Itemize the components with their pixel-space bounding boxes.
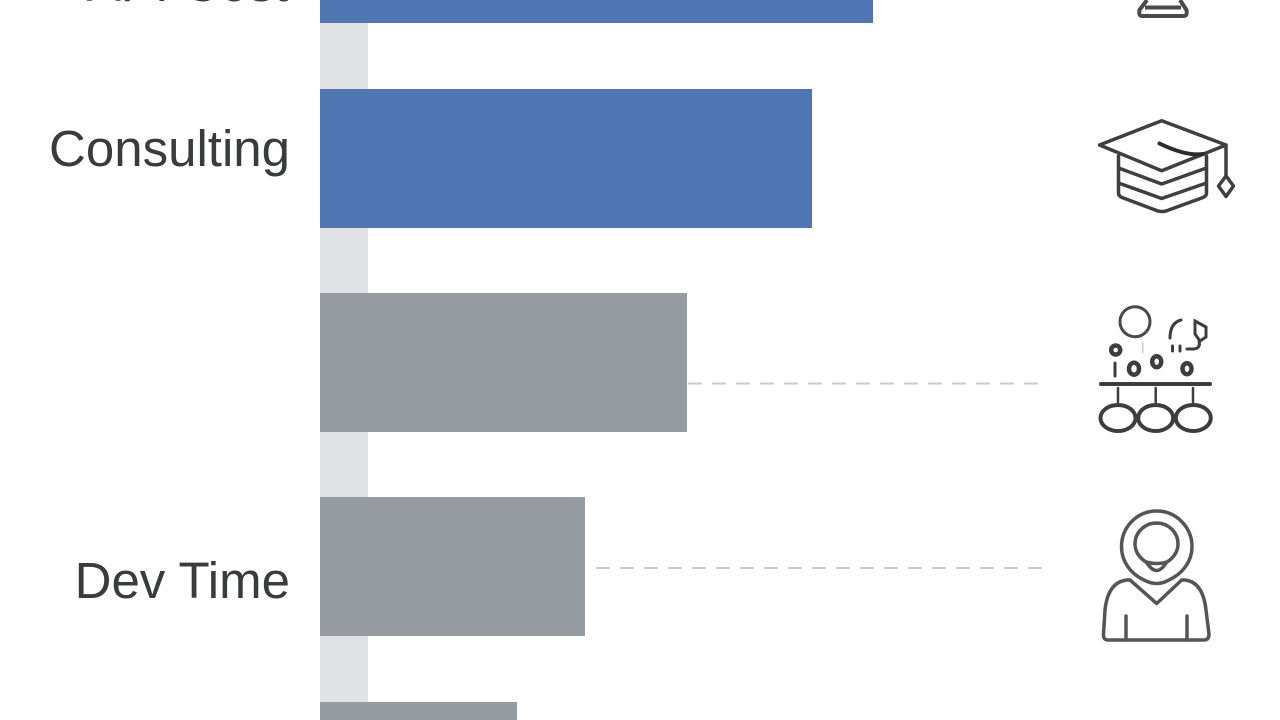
- bar: Consulting: [320, 89, 812, 228]
- dashed leader: row three: [688, 382, 1038, 384]
- axis track: [320, 20, 368, 705]
- icon: trophy base: [1139, 0, 1187, 16]
- icon: person: [1103, 511, 1209, 640]
- bar: API Cost: [320, 0, 873, 23]
- bar: bottom row: [320, 702, 517, 720]
- label: Consulting: Consulting: [49, 120, 290, 177]
- dashed leader: Dev Time: [596, 567, 1044, 569]
- icon: network diagram: [1100, 307, 1211, 431]
- label: Dev Time: Dev Time: [75, 552, 290, 609]
- icon: graduation cap: [1100, 121, 1234, 212]
- bar: Dev Time: [320, 497, 585, 636]
- bar: unlabelled grey row: [320, 293, 687, 432]
